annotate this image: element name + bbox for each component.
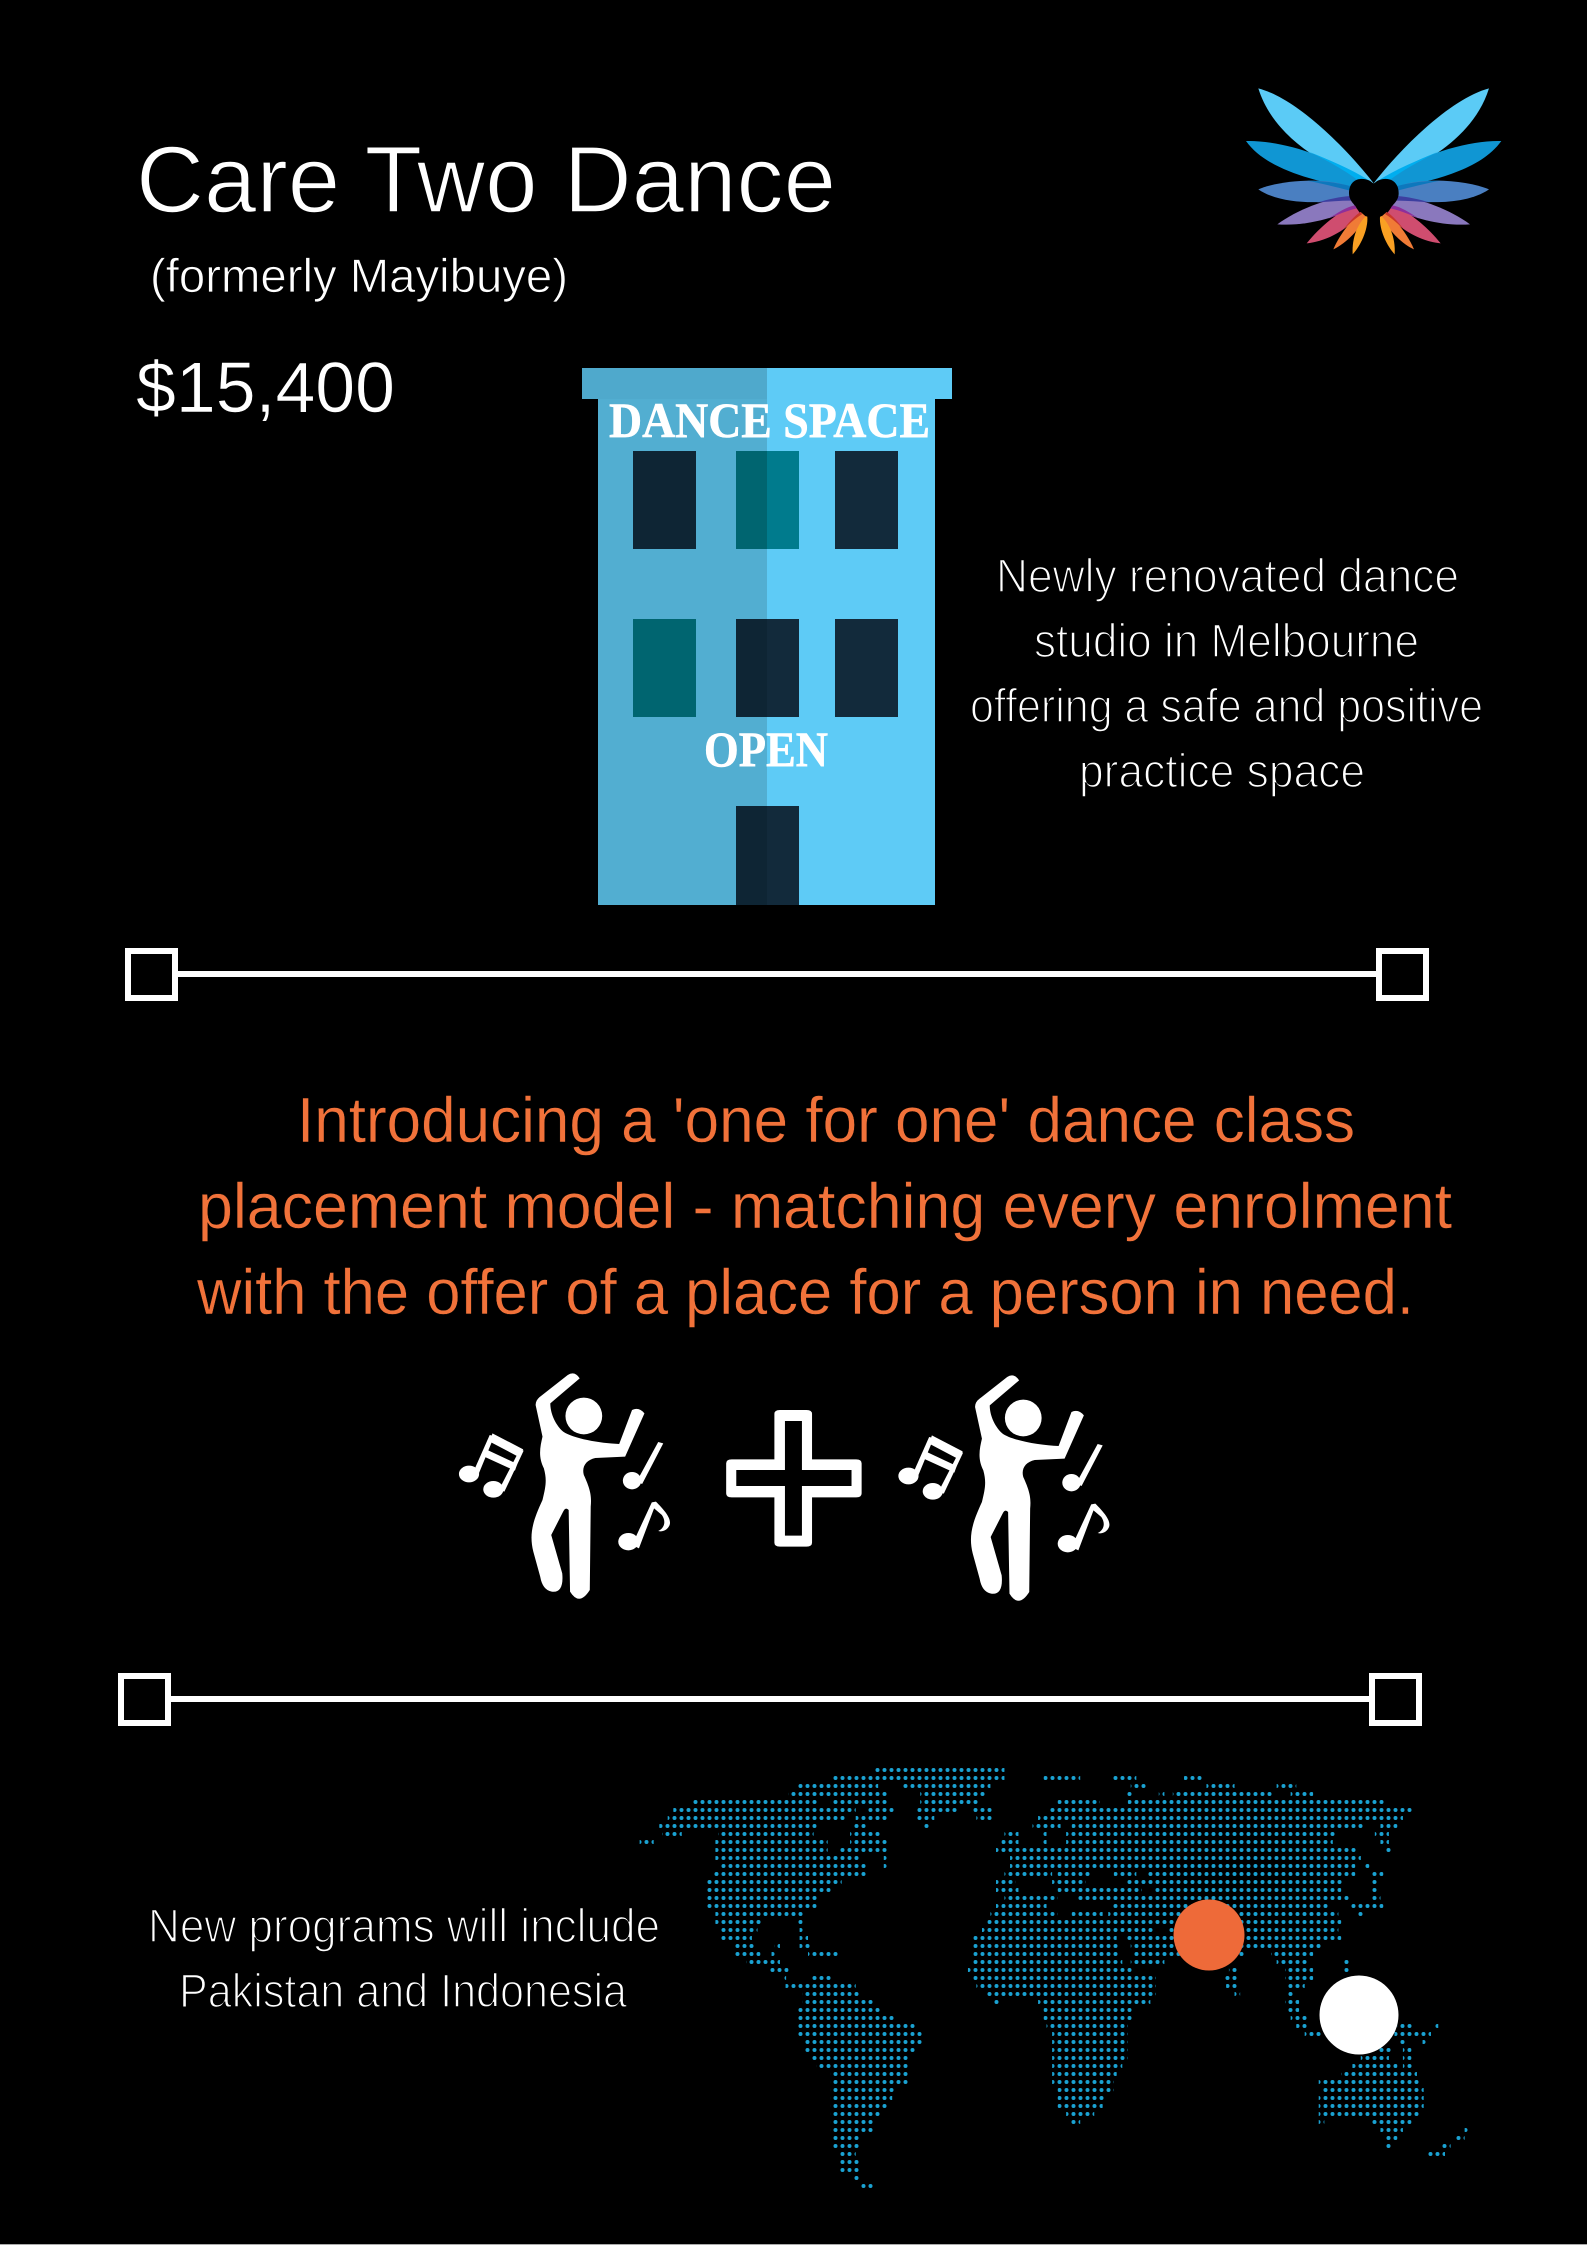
title: Care Two Dance <box>136 127 836 233</box>
icon: dance studio building <box>582 368 952 905</box>
studio description: offering a safe and positive <box>970 679 1483 732</box>
map marker: Pakistan <box>1174 1900 1244 1970</box>
studio description <box>970 549 1483 797</box>
icon: plus sign <box>726 1410 862 1547</box>
funding amount: $15,400 <box>136 349 395 428</box>
studio description: studio in Melbourne <box>1034 614 1419 667</box>
one for one model statement <box>196 1084 1452 1328</box>
building sign: dance space: DANCE SPACE <box>609 392 930 448</box>
new programs text: New programs will include <box>148 1899 660 1952</box>
building sign: open: OPEN <box>704 721 828 777</box>
studio description: Newly renovated dance <box>996 549 1459 602</box>
icon: dancer with music notes <box>459 1373 670 1599</box>
subtitle: (formerly Mayibuye) <box>150 249 568 302</box>
new programs text: Pakistan and Indonesia <box>179 1964 628 2017</box>
icon: second dancer with music notes <box>898 1375 1109 1601</box>
dotted world map <box>640 1766 1470 2190</box>
one for one model statement: Introducing a 'one for one' dance class <box>297 1084 1355 1156</box>
one for one model statement: placement model - matching every enrolment <box>198 1170 1452 1242</box>
one for one model statement: with the offer of a place for a person in need. <box>196 1256 1414 1328</box>
new programs text <box>148 1899 660 2017</box>
map marker: Indonesia <box>1320 1976 1398 2054</box>
icon: butterfly heart logo <box>1246 88 1501 254</box>
studio description: practice space <box>1079 744 1365 797</box>
